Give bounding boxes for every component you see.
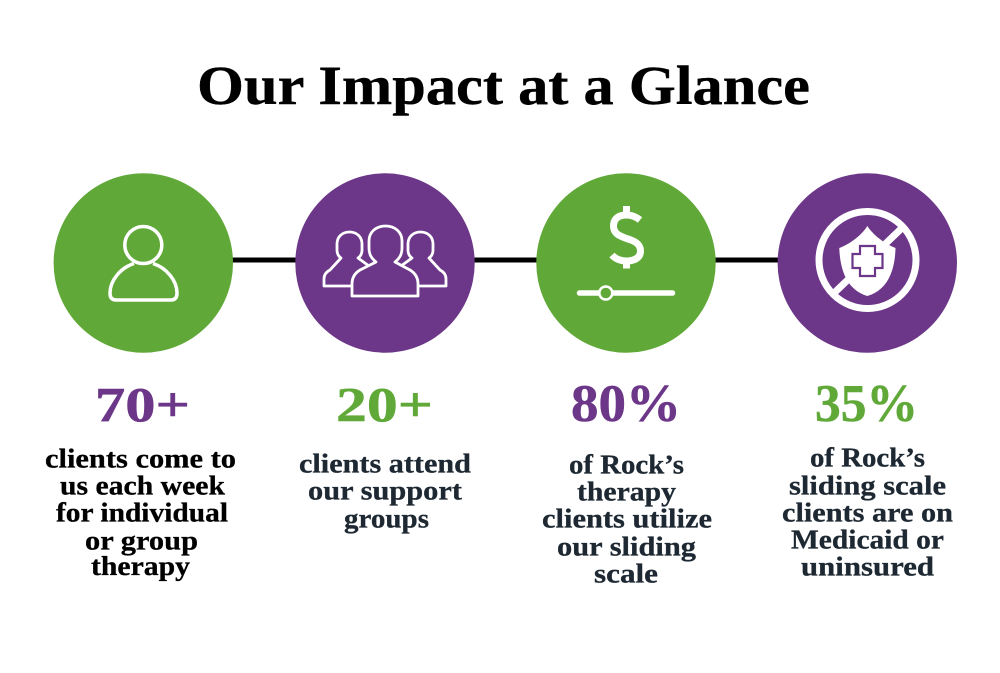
description: weekly clients: or group [85,524,198,556]
column: Medicaid or uninsured [778,173,957,582]
description: sliding scale [542,449,712,588]
description: weekly clients: therapy [91,550,190,581]
description: support groups: our support [308,475,463,506]
stat: 35%: 35% [815,375,918,433]
stat: 20+: 20+ [336,377,433,432]
icon: dollar sign with slider [536,173,716,353]
description: sliding scale: our sliding [557,530,696,562]
icon: crossed-out insurance shield [778,173,957,353]
icon: single person [54,173,233,353]
icon: group of people [295,173,475,353]
connector line [143,258,867,262]
description: support groups: clients attend [299,448,471,479]
column: weekly clients [45,173,236,581]
description: Medicaid or uninsured: clients are on [782,497,953,528]
description: Medicaid or uninsured: sliding scale [789,470,946,500]
description: weekly clients [45,443,236,581]
description: Medicaid or uninsured: of Rock’s [810,442,925,473]
description: Medicaid or uninsured: uninsured [801,551,934,582]
description: sliding scale: therapy [577,476,676,507]
description: sliding scale: of Rock’s [569,449,684,480]
description: sliding scale: scale [594,558,658,588]
column: support groups [295,173,475,534]
description: weekly clients: for individual [56,497,228,528]
description: support groups: groups [344,502,429,534]
description: support groups [299,448,471,534]
stat: 70+: 70+ [95,377,190,432]
description: sliding scale: clients utilize [542,503,712,534]
description: weekly clients: us each week [60,470,226,501]
column: sliding scale [536,173,716,589]
description: Medicaid or uninsured [782,442,953,582]
stat: 80%: 80% [571,375,681,433]
description: weekly clients: clients come to [45,443,236,474]
title: Our Impact at a Glance [197,55,810,116]
description: Medicaid or uninsured: Medicaid or [791,524,944,555]
